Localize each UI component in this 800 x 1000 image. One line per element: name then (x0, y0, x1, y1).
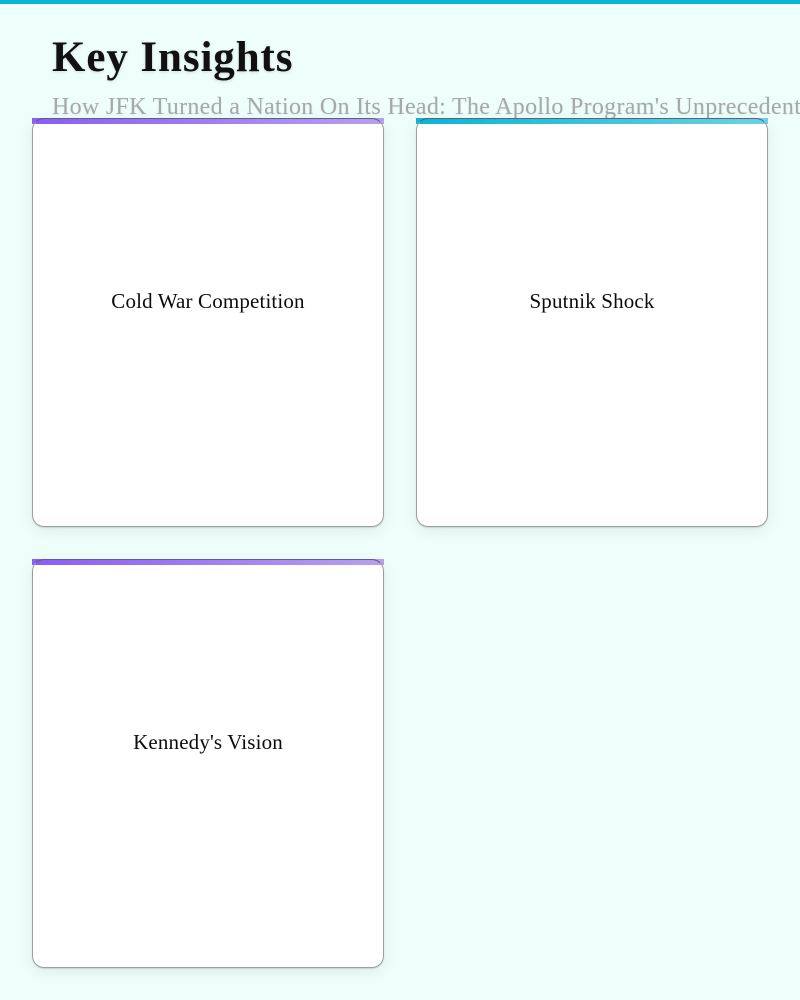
panel: Kennedy's Vision (32, 559, 384, 968)
card label: Cold War Competition (111, 289, 305, 313)
panel: Cold War Competition (32, 118, 384, 527)
card outline (32, 559, 384, 968)
top accent bar (0, 0, 800, 4)
card label: Sputnik Shock (529, 289, 655, 313)
title: Key Insights (52, 34, 293, 81)
card label: Kennedy's Vision (133, 730, 283, 754)
card accent bar: cyan (416, 118, 768, 124)
card accent bar: purple (32, 118, 384, 124)
card outline (32, 118, 384, 527)
panel: Sputnik Shock (416, 118, 768, 527)
card outline (416, 118, 768, 527)
card accent bar: purple (32, 559, 384, 565)
